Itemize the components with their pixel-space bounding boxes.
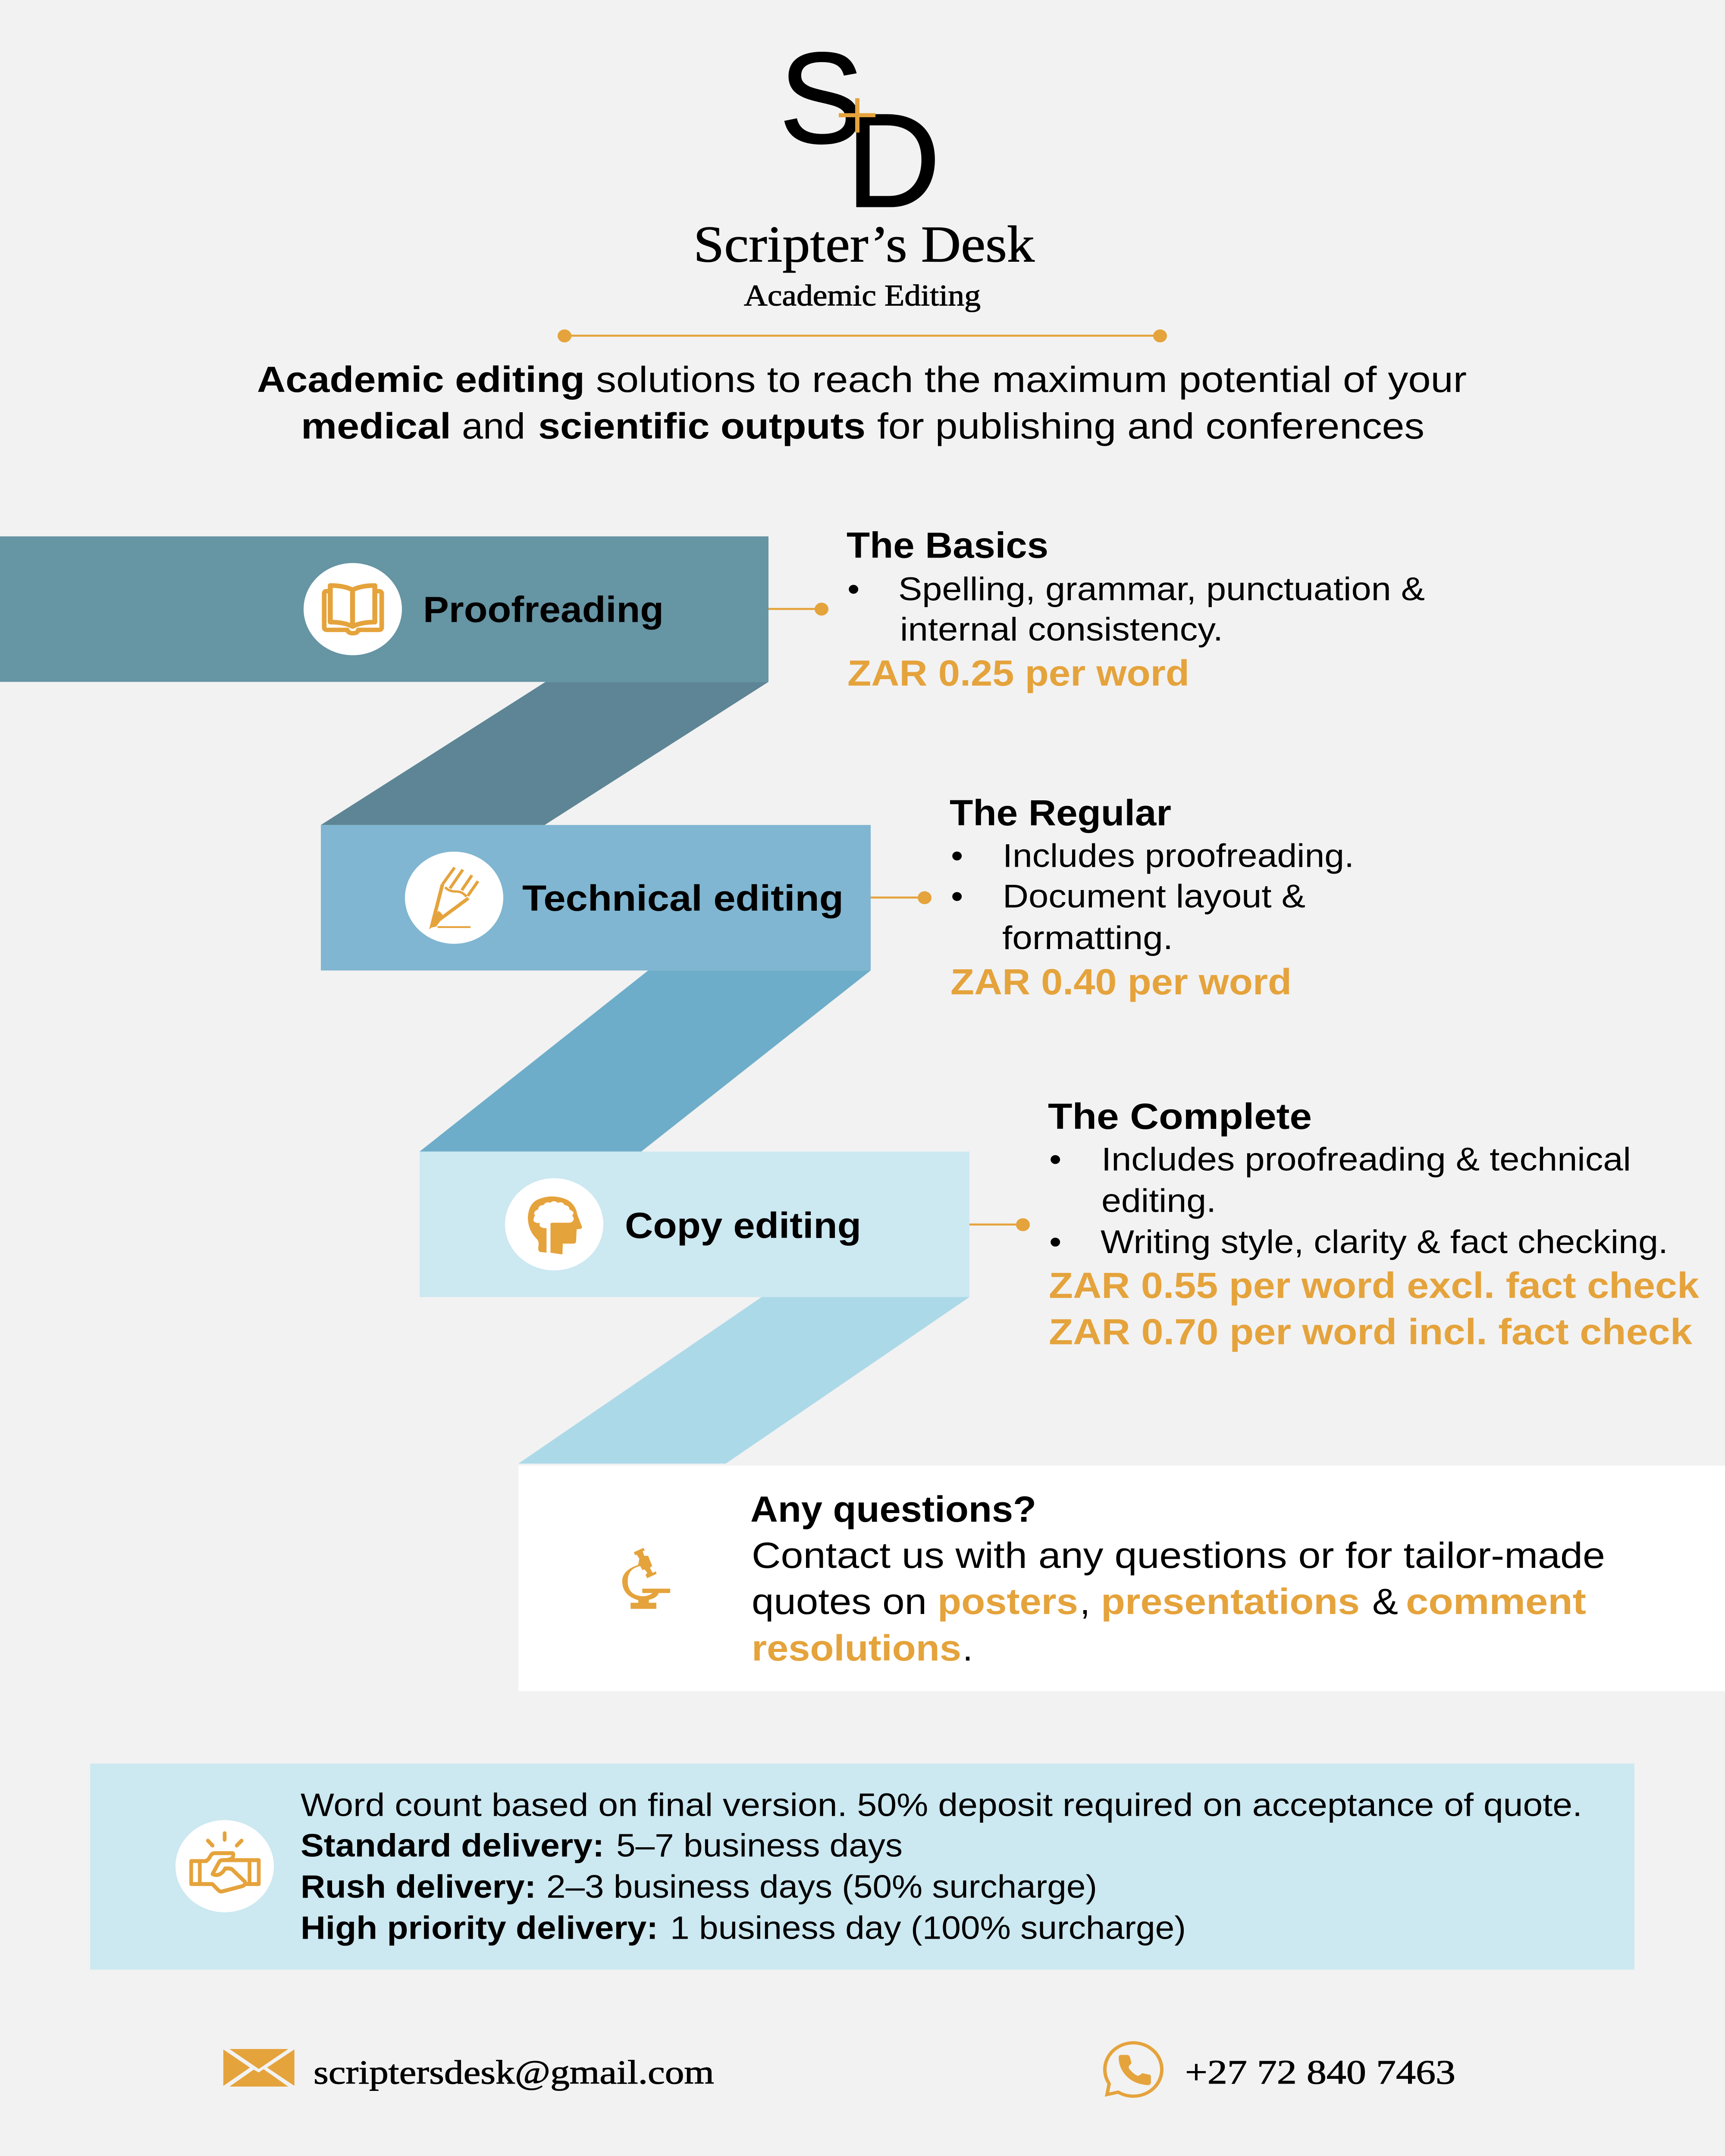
delivery text: 2–3 business days (50% surcharge) [546,1869,1097,1905]
logo: S+D monogram: D [846,86,941,235]
ribbon fold: copy to questions [518,1297,969,1463]
questions text: & [1372,1582,1398,1622]
text block: the regular: • [951,878,963,915]
brand name: Scripter’s Desk [693,215,1035,273]
questions text: Any questions? [750,1489,1036,1530]
text block: the complete: editing. [1101,1182,1216,1219]
connector: technical editing [871,891,932,904]
text block: the complete: Includes proofreading & technical [1101,1141,1631,1178]
text block: the basics: Spelling, grammar, punctuation & [898,570,1425,607]
icon: pencil [430,868,478,928]
text block: the complete: The Complete [1048,1097,1312,1137]
questions text: presentations [1101,1582,1360,1622]
email address: scriptersdesk@gmail.com [314,2053,714,2091]
questions text: resolutions [752,1628,961,1668]
band: copy editing [420,1152,969,1297]
logo: S+D monogram: S [779,25,864,170]
text block: the regular: ZAR 0.40 per word [950,962,1292,1002]
band: technical editing [321,825,871,971]
icon: microscope [622,1548,670,1609]
text block: the complete: ZAR 0.70 per word incl. fact check [1049,1312,1693,1352]
delivery text: 1 business day (100% surcharge) [670,1910,1186,1946]
text block: the regular: • [951,837,963,874]
questions text [750,1489,1605,1668]
label: proofreading: Proofreading [423,589,664,630]
questions text: , [1080,1582,1090,1622]
connector: proofreading [768,603,828,616]
band: proofreading [0,536,768,682]
questions text: quotes on [752,1582,927,1622]
text block: the complete: • [1049,1223,1061,1260]
tagline: and [462,406,525,446]
icon: open book [324,586,382,633]
questions text: . [963,1628,973,1668]
text block: the regular: Document layout & [1003,878,1305,915]
panel: delivery terms [90,1764,1634,1970]
connector: copy editing [969,1218,1030,1231]
text block: the basics: The Basics [847,525,1048,566]
text block: the complete: ZAR 0.55 per word excl. fact check [1049,1265,1700,1306]
tagline: solutions to reach the maximum potential of your [596,360,1467,400]
text block: the basics: ZAR 0.25 per word [847,653,1189,693]
label: copy editing: Copy editing [625,1206,861,1246]
text block: the basics: • [847,570,859,607]
tagline: scientific outputs [538,406,866,446]
divider with end dots [558,329,1167,342]
tagline: medical [301,406,451,446]
delivery text: Standard delivery: [301,1828,604,1864]
delivery text: Word count based on final version. 50% deposit required on acceptance of quote. [301,1787,1582,1823]
icon: head with brain tree [528,1197,582,1254]
brand subtitle: Academic Editing [744,279,981,312]
text block: the basics: internal consistency. [900,611,1223,648]
text block: the regular [950,793,1354,1002]
tagline [257,360,1467,446]
text block: the basics [847,525,1425,693]
icon: envelope [223,2049,295,2087]
delivery text: High priority delivery: [301,1910,658,1946]
text block: the complete: • [1049,1141,1061,1178]
text block: the complete: Writing style, clarity & fact checking. [1101,1223,1668,1260]
text block: the complete [1048,1097,1700,1352]
questions text: comment [1406,1582,1586,1622]
icon: handshake [191,1833,259,1892]
questions text: posters [938,1582,1078,1622]
text block: the regular: Includes proofreading. [1003,837,1354,874]
text block: the regular: formatting. [1002,919,1173,956]
delivery text: 5–7 business days [616,1828,903,1864]
phone number: +27 72 840 7463 [1185,2053,1455,2091]
delivery text [301,1787,1582,1946]
logo: S+D monogram [779,25,941,235]
icon: phone [1105,2043,1162,2096]
questions text: Contact us with any questions or for tailor-made [752,1536,1605,1576]
tagline: for publishing and conferences [877,406,1424,446]
ribbon fold: proofreading to technical [321,682,768,825]
delivery text: Rush delivery: [301,1869,536,1905]
label: technical editing: Technical editing [522,878,844,918]
tagline: Academic editing [257,360,585,400]
ribbon fold: technical to copy [420,971,871,1152]
text block: the regular: The Regular [950,793,1171,834]
panel: any questions [518,1466,1725,1691]
